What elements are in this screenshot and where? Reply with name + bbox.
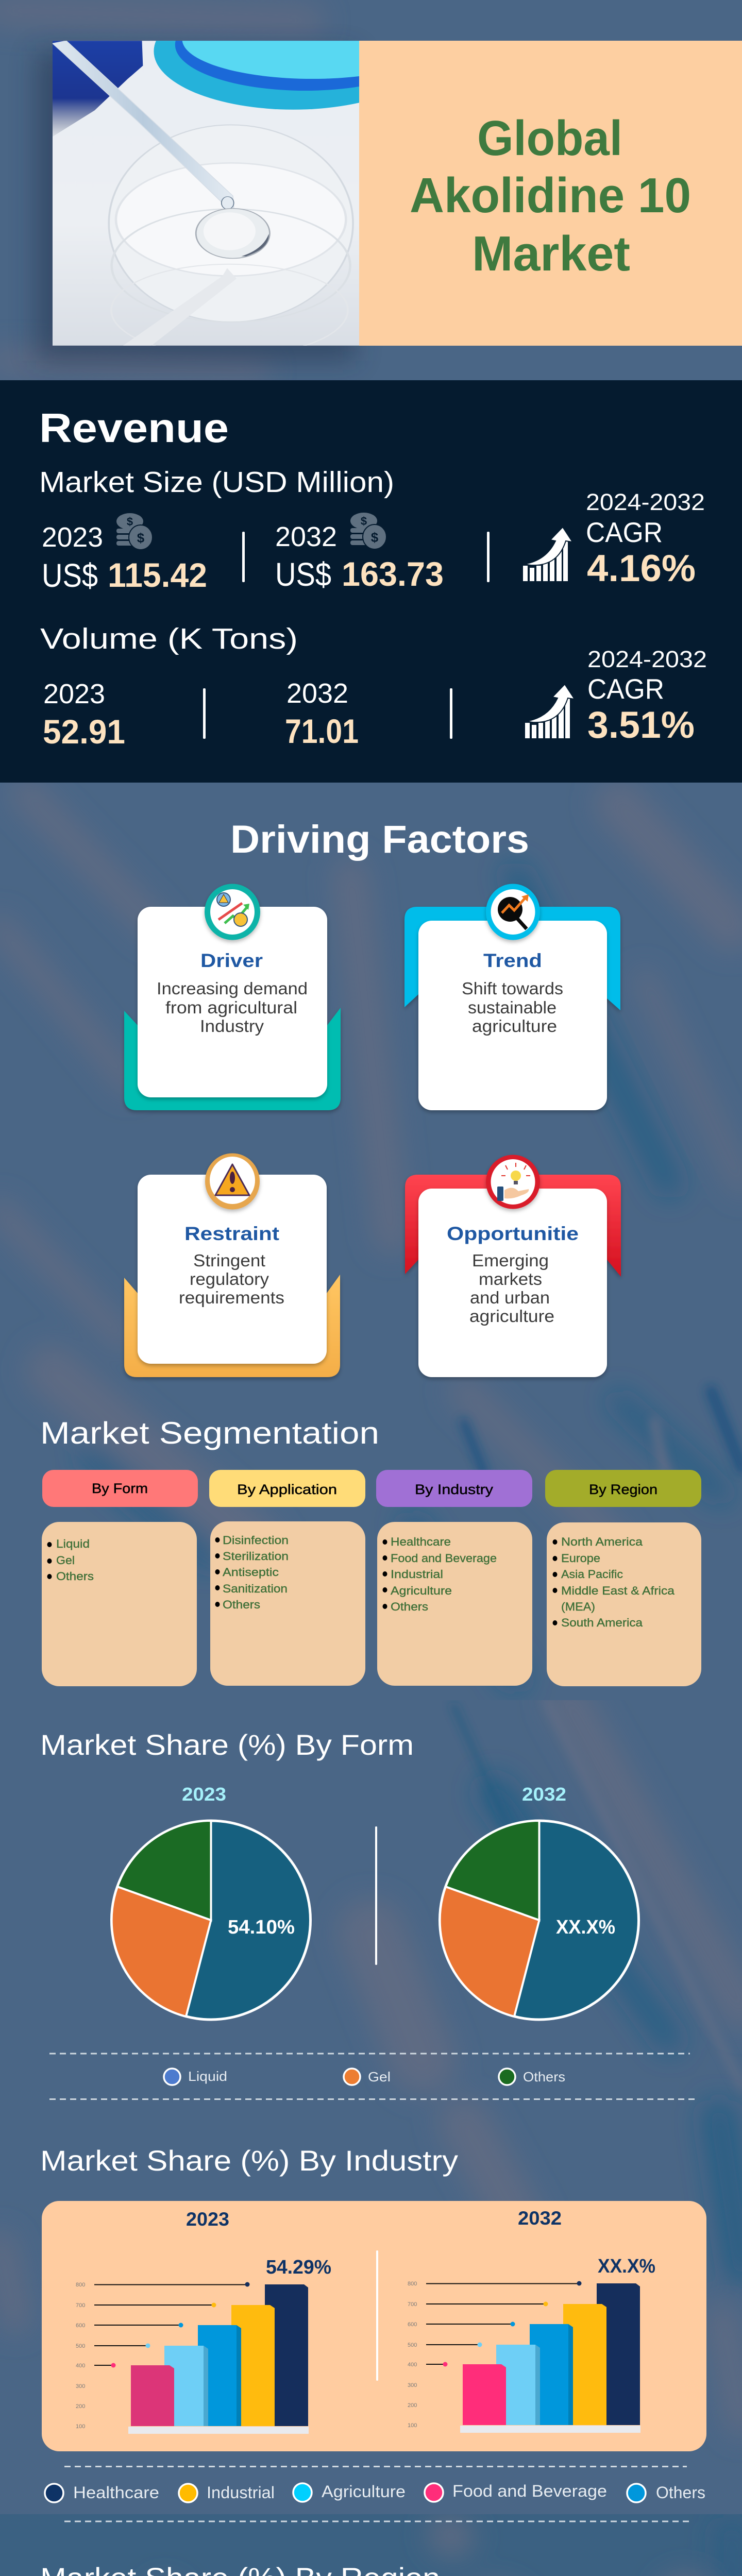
stat: volume 2023 (43, 679, 125, 751)
legend: form: Others (523, 2069, 565, 2084)
panel: revenue (0, 380, 742, 783)
list: region: South America (561, 1616, 643, 1629)
text: restraint description: Stringent (193, 1251, 265, 1270)
label: opportunitie: Opportunitie (447, 1223, 579, 1244)
stat: cagr revenue: 2024-2032 (586, 489, 705, 515)
label: restraint: Restraint (184, 1223, 279, 1244)
list: region: (MEA) (561, 1600, 595, 1613)
title text (410, 111, 691, 281)
label: trend: Trend (483, 950, 542, 971)
column: by region (545, 1470, 701, 1686)
heading: driving factors: Driving Factors (230, 818, 529, 861)
chart: industry bars 2032: 600 (408, 2321, 417, 2328)
list: industry: Healthcare (391, 1535, 451, 1548)
header: by industry (376, 1470, 532, 1507)
list: region: Asia Pacific (561, 1568, 623, 1581)
chart: form pie 2023 (111, 1784, 310, 2020)
list: application: Others (223, 1598, 260, 1611)
list: industry: Agriculture (391, 1584, 452, 1597)
text: restraint description (179, 1251, 284, 1307)
chart: industry bars 2032: 200 (408, 2402, 417, 2409)
stat: volume 2032 (285, 678, 359, 750)
chart: industry bars 2023: 300 (76, 2383, 85, 2389)
chart: industry bars 2032: 700 (408, 2301, 417, 2308)
column: by form (42, 1470, 198, 1686)
divider (376, 2250, 378, 2381)
legend: form: Gel (368, 2069, 391, 2084)
stat: market size 2032: US$ (275, 556, 331, 593)
icon: coins 2032 (350, 513, 386, 549)
list: region (547, 1522, 701, 1686)
list: industry (377, 1522, 532, 1686)
stat: market size 2032 (275, 521, 444, 593)
list: application: Antiseptic (223, 1566, 279, 1579)
hero photo shadow (36, 52, 356, 361)
divider (450, 688, 452, 739)
icon: coins 2032: $ (371, 530, 379, 545)
stat: market size 2032: 163.73 (342, 555, 444, 593)
chart: industry bars 2023: 700 (76, 2302, 85, 2309)
text: trend description: agriculture (472, 1016, 557, 1036)
text: opportunitie description (469, 1251, 554, 1326)
hero photo: pipette and petri dish (53, 41, 359, 346)
legend: form (164, 2069, 565, 2085)
title text: Market (472, 226, 630, 281)
chart: form pie 2032: 2032 (522, 1784, 566, 1805)
list: application: Disinfection (223, 1534, 289, 1547)
legend: industry: Food and Beverage (452, 2482, 607, 2500)
divider (487, 532, 490, 582)
list: form (42, 1522, 197, 1686)
hero banner (28, 41, 742, 369)
chart: industry bars 2023: 54.29% (266, 2257, 331, 2278)
header: by form: By Form (92, 1481, 148, 1496)
stat: cagr volume: 2024-2032 (587, 646, 707, 672)
chart: industry bars 2032: 100 (408, 2422, 417, 2429)
stat: cagr volume: CAGR (587, 673, 664, 705)
legend: form: Liquid (188, 2069, 227, 2084)
chart: industry bars 2032 (408, 2208, 655, 2433)
chart: industry bars 2032: 300 (408, 2382, 417, 2388)
label: driver: Driver (200, 950, 263, 971)
text: trend description (462, 979, 563, 1036)
heading: market share by industry: Market Share (%) By Industry (40, 2144, 458, 2177)
legend: industry (45, 2482, 705, 2502)
chart: industry bars 2023: 800 (76, 2282, 85, 2288)
section: market share by form (40, 1728, 695, 2100)
text: restraint description: regulatory (190, 1269, 269, 1289)
chart: form pie 2023: 54.10% (228, 1917, 295, 1938)
stat: cagr volume: 3.51% (587, 704, 695, 746)
divider (375, 1826, 377, 1965)
chart: industry bars 2032: XX.X% (598, 2256, 655, 2277)
legend: industry: Industrial (207, 2483, 275, 2502)
list: industry: Industrial (391, 1568, 443, 1581)
chart: industry bars 2023: 600 (76, 2323, 85, 2329)
icon: coins 2023: $ (137, 530, 145, 546)
text: driver description (157, 979, 308, 1036)
header: by application: By Application (237, 1482, 337, 1497)
list: form: Others (56, 1570, 94, 1583)
heading: revenue: Revenue (39, 405, 229, 451)
icon: growth chart (523, 527, 572, 581)
chart: industry bars 2032: 400 (408, 2362, 417, 2368)
list: region: Middle East & Africa (561, 1584, 675, 1597)
card: driver (124, 884, 341, 1110)
stat: volume 2023: 52.91 (43, 713, 125, 751)
list: application: Sterilization (223, 1550, 289, 1563)
title panel (359, 41, 742, 346)
text: opportunitie description: Emerging (472, 1251, 549, 1270)
card: restraint (124, 1153, 340, 1377)
header: by region: By Region (589, 1482, 657, 1497)
text: trend description: Shift towards (462, 979, 563, 998)
title text: Akolidine 10 (410, 168, 691, 223)
divider (242, 532, 245, 582)
icon: coins 2032: $ (361, 515, 367, 528)
stat: cagr revenue: 4.16% (587, 548, 696, 589)
stat: cagr revenue (586, 489, 705, 589)
stat: cagr revenue: CAGR (586, 516, 663, 548)
chart: industry bars 2023: 400 (76, 2363, 85, 2369)
stat: volume 2032: 2032 (286, 678, 348, 709)
column: by industry (376, 1470, 532, 1686)
stat: volume 2023: 2023 (43, 679, 105, 709)
text: trend description: sustainable (468, 998, 556, 1017)
legend: industry: Agriculture (322, 2482, 406, 2501)
chart: industry bars 2032: 800 (408, 2281, 417, 2287)
heading: market share by form: Market Share (%) By Form (40, 1728, 414, 1761)
header: by application (209, 1470, 365, 1507)
list: industry: Others (391, 1600, 428, 1613)
header: by form (42, 1470, 198, 1507)
section: driving factors (123, 818, 622, 1381)
chart: form pie 2032: XX.X% (556, 1917, 615, 1938)
chart: industry bars 2023: 500 (76, 2343, 85, 2349)
column: by application (209, 1470, 365, 1686)
chart: industry bars 2023: 200 (76, 2403, 85, 2410)
text: opportunitie description: and urban (470, 1288, 550, 1307)
stat: cagr volume (587, 646, 707, 746)
header: by industry: By Industry (415, 1482, 494, 1497)
icon: coins 2023 (116, 513, 153, 550)
icon: driver (205, 884, 260, 940)
stat: market size 2023: US$ (42, 557, 98, 594)
text: restraint description: requirements (179, 1288, 284, 1307)
text: driver description: Industry (200, 1016, 264, 1036)
stat: volume 2032: 71.01 (285, 712, 359, 750)
icon: restraint (205, 1153, 260, 1210)
text: opportunitie description: agriculture (469, 1307, 554, 1326)
list: industry: Food and Beverage (391, 1552, 497, 1565)
chart: form pie 2023: 2023 (182, 1784, 226, 1805)
icon: growth chart (525, 684, 575, 738)
list: form: Gel (56, 1554, 75, 1567)
legend: industry: Healthcare (73, 2483, 159, 2502)
list: application (210, 1521, 365, 1686)
heading: volume: Volume (K Tons) (40, 622, 298, 655)
stat: market size 2023: 2023 (42, 522, 103, 553)
heading: market size: Market Size (USD Million) (39, 466, 394, 499)
text: opportunitie description: markets (479, 1269, 542, 1289)
text: driver description: Increasing demand (157, 979, 308, 998)
chart: industry bars 2032: 2032 (518, 2208, 562, 2229)
chart: industry bars 2032: 500 (408, 2342, 417, 2348)
chart: form pie 2032 (440, 1784, 639, 2020)
icon: opportunitie (486, 1155, 540, 1209)
chart: industry bars 2023: 100 (76, 2424, 85, 2430)
icon: trend (486, 884, 540, 940)
list: application: Sanitization (223, 1582, 288, 1595)
card: opportunitie (405, 1155, 621, 1377)
section: market share by industry (40, 2144, 706, 2503)
divider (203, 688, 206, 739)
panel: industry charts (42, 2201, 706, 2451)
list: region: North America (561, 1535, 643, 1548)
header: by region (545, 1470, 701, 1507)
stat: market size 2023 (42, 522, 207, 594)
heading: market segmentation: Market Segmentation (40, 1416, 379, 1450)
legend: industry: Others (656, 2483, 705, 2502)
list: region: Europe (561, 1552, 600, 1565)
text: driver description: from agricultural (165, 998, 297, 1017)
title text: Global (477, 111, 622, 166)
list: form: Liquid (56, 1537, 90, 1550)
chart: industry bars 2023 (76, 2209, 331, 2434)
section: market segmentation (40, 1416, 701, 1686)
stat: market size 2032: 2032 (275, 521, 337, 552)
stat: market size 2023: 115.42 (108, 556, 207, 594)
card: trend (404, 884, 620, 1110)
chart: industry bars 2023: 2023 (186, 2209, 229, 2230)
icon: coins 2023: $ (127, 515, 133, 528)
